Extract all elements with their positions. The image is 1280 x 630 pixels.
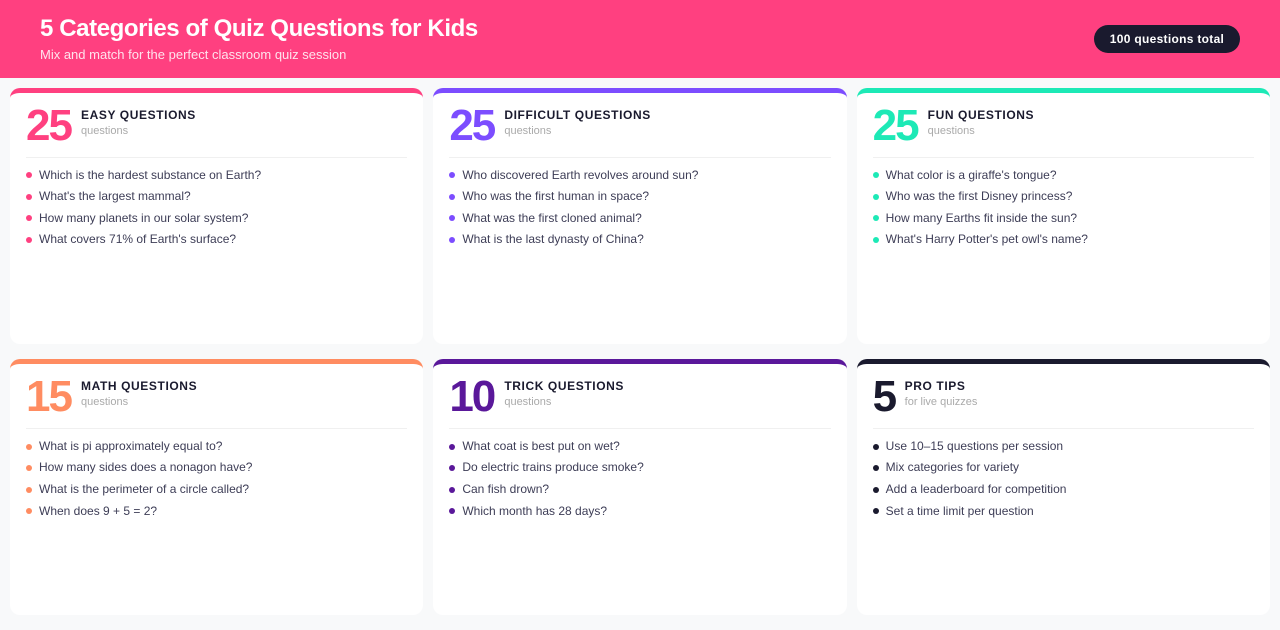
heading: MATH QUESTIONS	[81, 379, 197, 393]
question item: Can fish drown?	[462, 482, 549, 496]
total badge: 100 questions total	[1110, 32, 1224, 46]
title: 5 Categories of Quiz Questions for Kids	[40, 15, 478, 42]
question item: When does 9 + 5 = 2?	[39, 504, 157, 518]
question item: Which month has 28 days?	[462, 504, 607, 518]
question item: What's the largest mammal?	[39, 189, 191, 203]
question item: What color is a giraffe's tongue?	[886, 168, 1056, 182]
unit label: questions	[81, 125, 128, 137]
question item: What was the first cloned animal?	[462, 211, 642, 225]
total badge	[1094, 25, 1240, 53]
question item: How many Earths fit inside the sun?	[886, 211, 1077, 225]
tip item: Use 10–15 questions per session	[886, 439, 1063, 453]
question item: Who was the first human in space?	[462, 189, 649, 203]
question item: Which is the hardest substance on Earth?	[39, 168, 261, 182]
unit label: questions	[504, 396, 551, 408]
unit label: questions	[504, 125, 551, 137]
unit label: questions	[81, 396, 128, 408]
question item: What is pi approximately equal to?	[39, 439, 222, 453]
count: 15	[26, 372, 71, 421]
unit label: questions	[928, 125, 975, 137]
question item: What covers 71% of Earth's surface?	[39, 232, 236, 246]
question item: Who was the first Disney princess?	[886, 189, 1072, 203]
tip item: Mix categories for variety	[886, 460, 1019, 474]
count: 10	[449, 372, 494, 421]
count: 25	[449, 101, 494, 150]
header banner	[0, 0, 1280, 78]
question item: What's Harry Potter's pet owl's name?	[886, 232, 1088, 246]
question item: How many planets in our solar system?	[39, 211, 248, 225]
unit label: for live quizzes	[905, 396, 977, 408]
panel: pro tips	[857, 359, 1270, 615]
count: 25	[26, 101, 71, 150]
question item: What is the last dynasty of China?	[462, 232, 644, 246]
heading: DIFFICULT QUESTIONS	[504, 108, 651, 122]
tip item: Set a time limit per question	[886, 504, 1034, 518]
question item: How many sides does a nonagon have?	[39, 460, 252, 474]
subtitle: Mix and match for the perfect classroom quiz session	[40, 47, 346, 62]
panel: trick questions	[433, 359, 847, 615]
panel: easy questions	[10, 88, 423, 344]
question item: Who discovered Earth revolves around sun?	[462, 168, 698, 182]
panel: fun questions	[857, 88, 1270, 344]
heading: EASY QUESTIONS	[81, 108, 196, 122]
panel: difficult questions	[433, 88, 847, 344]
heading: PRO TIPS	[905, 379, 965, 393]
question item: What is the perimeter of a circle called?	[39, 482, 249, 496]
panel: math questions	[10, 359, 423, 615]
tip item: Add a leaderboard for competition	[886, 482, 1066, 496]
heading: FUN QUESTIONS	[928, 108, 1034, 122]
heading: TRICK QUESTIONS	[504, 379, 624, 393]
count: 25	[873, 101, 918, 150]
count: 5	[873, 372, 895, 421]
question item: Do electric trains produce smoke?	[462, 460, 644, 474]
question item: What coat is best put on wet?	[462, 439, 620, 453]
